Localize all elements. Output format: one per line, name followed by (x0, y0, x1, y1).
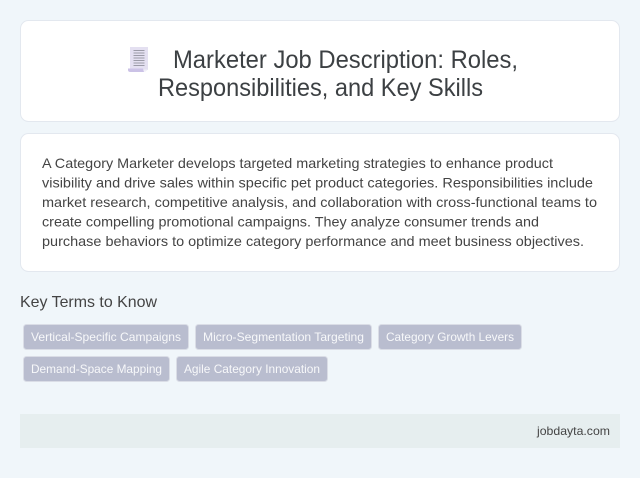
chip: demand-space mapping (24, 356, 170, 382)
chip: agile category innovation (176, 356, 328, 382)
title: Marketer Job Description: Roles, (173, 46, 518, 74)
footer bar (20, 414, 620, 448)
description text: visibility and drive sales within specific pet product categories. Responsibilities include (42, 174, 593, 190)
description text: A Category Marketer develops targeted marketing strategies to enhance product (42, 155, 553, 171)
chip: demand-space mapping: Demand-Space Mapping (31, 362, 162, 376)
panel: title card (20, 20, 620, 122)
chip: vertical-specific campaigns: Vertical-Specific Campaigns (31, 330, 181, 344)
description text: market research, competitive analysis, and collaboration with cross-functional teams to (42, 194, 597, 210)
chip: category growth levers (378, 324, 522, 350)
title (158, 46, 518, 102)
panel: key term chips (24, 324, 522, 382)
chip: micro-segmentation targeting (196, 324, 372, 350)
description text: purchase behaviors to optimize category performance and meet business objectives. (42, 233, 584, 249)
title: Responsibilities, and Key Skills (158, 74, 483, 102)
chip: category growth levers: Category Growth Levers (386, 330, 514, 344)
chip: micro-segmentation targeting: Micro-Segmentation Targeting (203, 330, 364, 344)
heading: key terms: Key Terms to Know (20, 294, 157, 311)
footer source text: jobdayta.com (536, 424, 610, 438)
panel: description card (20, 134, 620, 272)
description text: create compelling promotional campaigns. They analyze consumer trends and (42, 214, 539, 230)
chip: agile category innovation: Agile Category Innovation (184, 362, 320, 376)
chip: vertical-specific campaigns (24, 324, 188, 350)
icon: document scroll (128, 47, 148, 72)
description text (42, 155, 597, 249)
